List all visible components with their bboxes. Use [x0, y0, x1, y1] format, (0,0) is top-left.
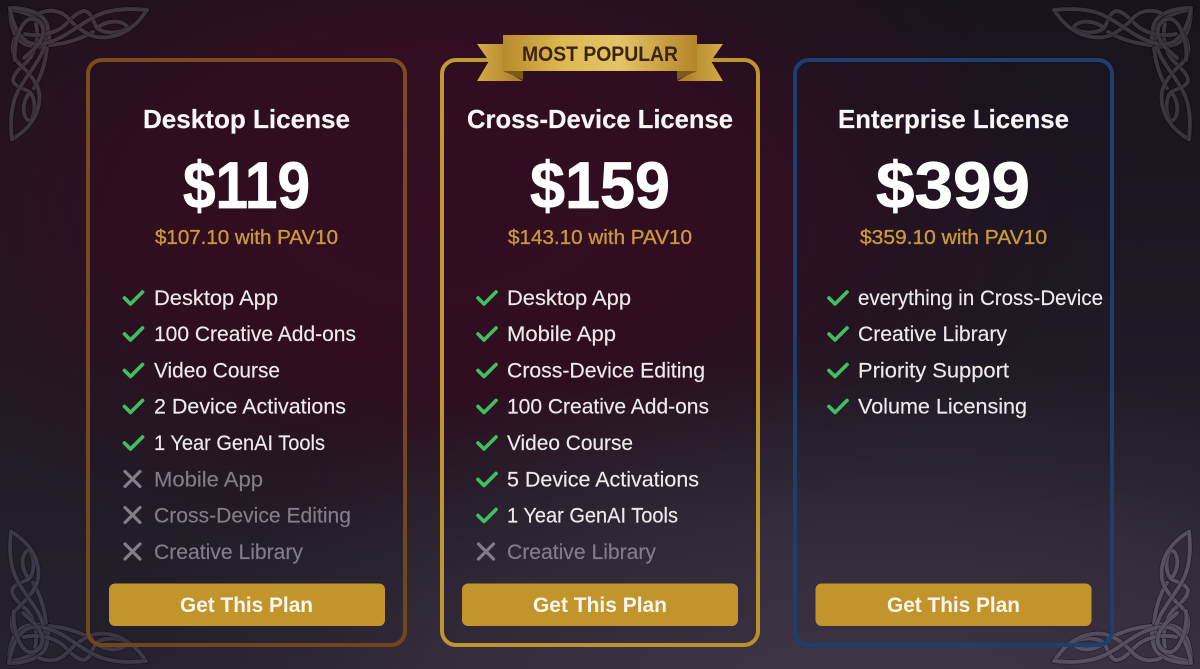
feature list: 100 Creative Add-ons [154, 323, 356, 346]
price: $119 [183, 148, 310, 222]
card frame [88, 60, 405, 645]
feature list: 1 Year GenAI Tools [154, 432, 325, 455]
feature list: Creative Library [507, 541, 656, 564]
icon: celtic knot top right [1054, 8, 1191, 140]
discount price: $107.10 with PAV10 [155, 227, 338, 249]
feature list: 1 Year GenAI Tools [507, 504, 678, 528]
heading: Enterprise License [838, 104, 1069, 134]
button [816, 584, 1092, 626]
feature list [478, 287, 709, 564]
button [462, 584, 738, 626]
discount price: $143.10 with PAV10 [508, 227, 692, 249]
panel: enterprise license [795, 60, 1112, 645]
banner: most popular ribbon [477, 35, 723, 81]
feature list: Desktop App [507, 287, 631, 310]
feature list: Mobile App [154, 468, 263, 492]
discount price: $359.10 with PAV10 [860, 227, 1047, 249]
feature list: Volume Licensing [858, 396, 1027, 418]
feature list: Creative Library [154, 541, 303, 564]
price: $159 [530, 148, 670, 222]
feature list: Mobile App [507, 323, 616, 346]
feature list: Video Course [507, 432, 633, 455]
feature list: Cross-Device Editing [154, 504, 351, 528]
feature list: everything in Cross-Device [858, 287, 1103, 310]
button: Get This Plan [887, 594, 1020, 617]
icon: celtic knot bottom right [1054, 531, 1191, 663]
feature list: Priority Support [858, 360, 1009, 382]
card frame [795, 60, 1112, 645]
price: $399 [876, 148, 1030, 222]
feature list: 5 Device Activations [507, 468, 699, 492]
feature list: Creative Library [858, 323, 1007, 346]
icon: celtic knot bottom left [9, 531, 146, 663]
feature list [829, 287, 1103, 418]
panel: cross-device license [442, 60, 758, 645]
button [109, 584, 385, 626]
heading: Cross-Device License [467, 104, 733, 134]
heading: Desktop License [143, 104, 350, 134]
feature list [124, 287, 356, 564]
icon: celtic knot top left [10, 8, 147, 140]
panel: desktop license [88, 60, 405, 645]
feature list: 2 Device Activations [154, 396, 346, 418]
banner: most popular ribbon: MOST POPULAR [522, 43, 678, 66]
feature list: Cross-Device Editing [507, 360, 705, 382]
button: Get This Plan [180, 594, 313, 617]
feature list: Video Course [154, 360, 280, 382]
card frame [442, 60, 758, 645]
feature list: Desktop App [154, 287, 278, 310]
button: Get This Plan [533, 594, 667, 617]
feature list: 100 Creative Add-ons [507, 396, 709, 418]
